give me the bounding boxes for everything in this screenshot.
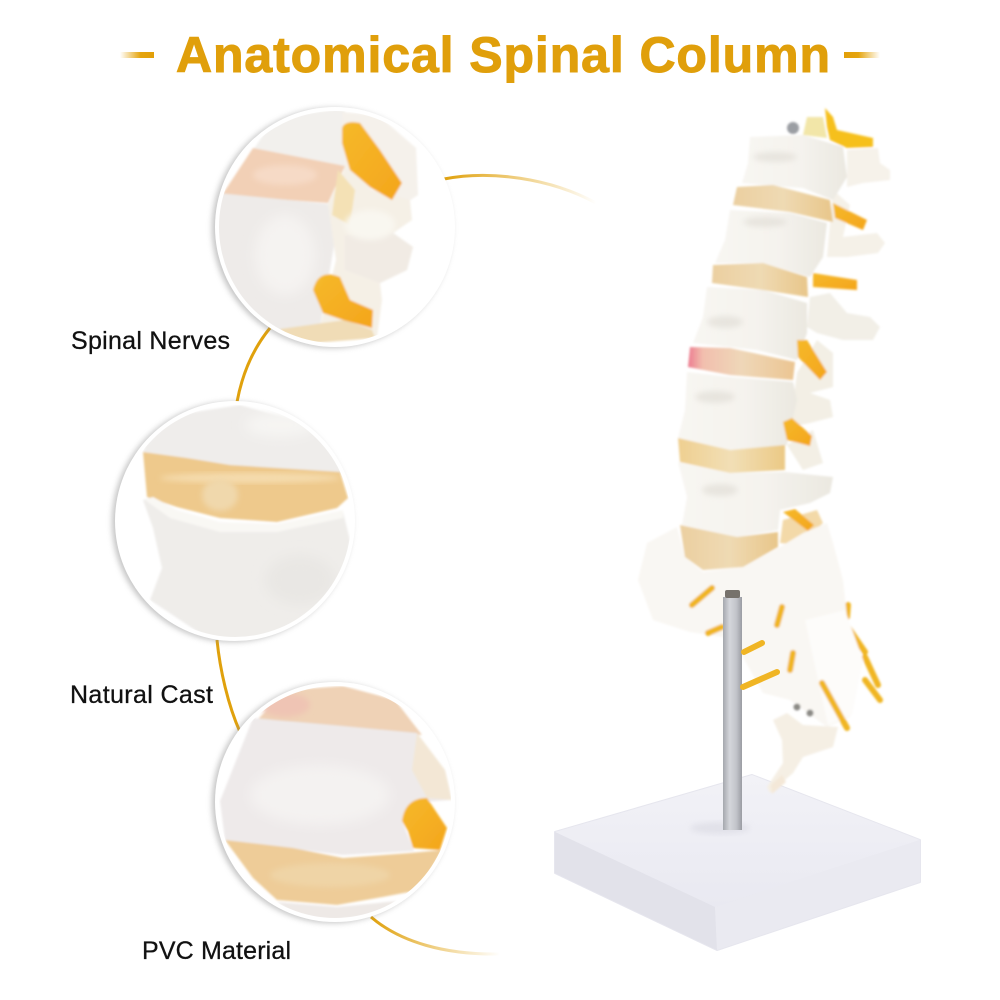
support pole [723,590,742,830]
coccyx [767,713,838,793]
title: Anatomical Spinal Column [176,27,830,83]
sacrum nerves front [692,588,847,728]
discs [733,185,833,222]
label: Spinal Nerves: Spinal Nerves [71,327,230,355]
label: PVC Material: PVC Material [142,937,291,965]
spine model [638,108,890,794]
screws [794,704,814,716]
nerve roots [825,108,873,148]
connector arcs [217,175,596,954]
top screw and pale disc [787,122,799,134]
detail circle: PVC material [212,682,455,923]
sacrum [638,523,863,727]
detail circle: natural cast [112,401,355,642]
label: Natural Cast: Natural Cast [70,681,213,709]
title flourish right [844,52,880,58]
title flourish left [120,52,154,58]
bone soft shading [695,152,797,496]
transverse processes [847,148,890,187]
detail circle: spinal nerves [212,107,455,348]
base stand [555,775,920,950]
front sacral nerves over pole [743,643,777,687]
sacral nerves behind [845,605,880,700]
vertebrae [742,135,847,200]
